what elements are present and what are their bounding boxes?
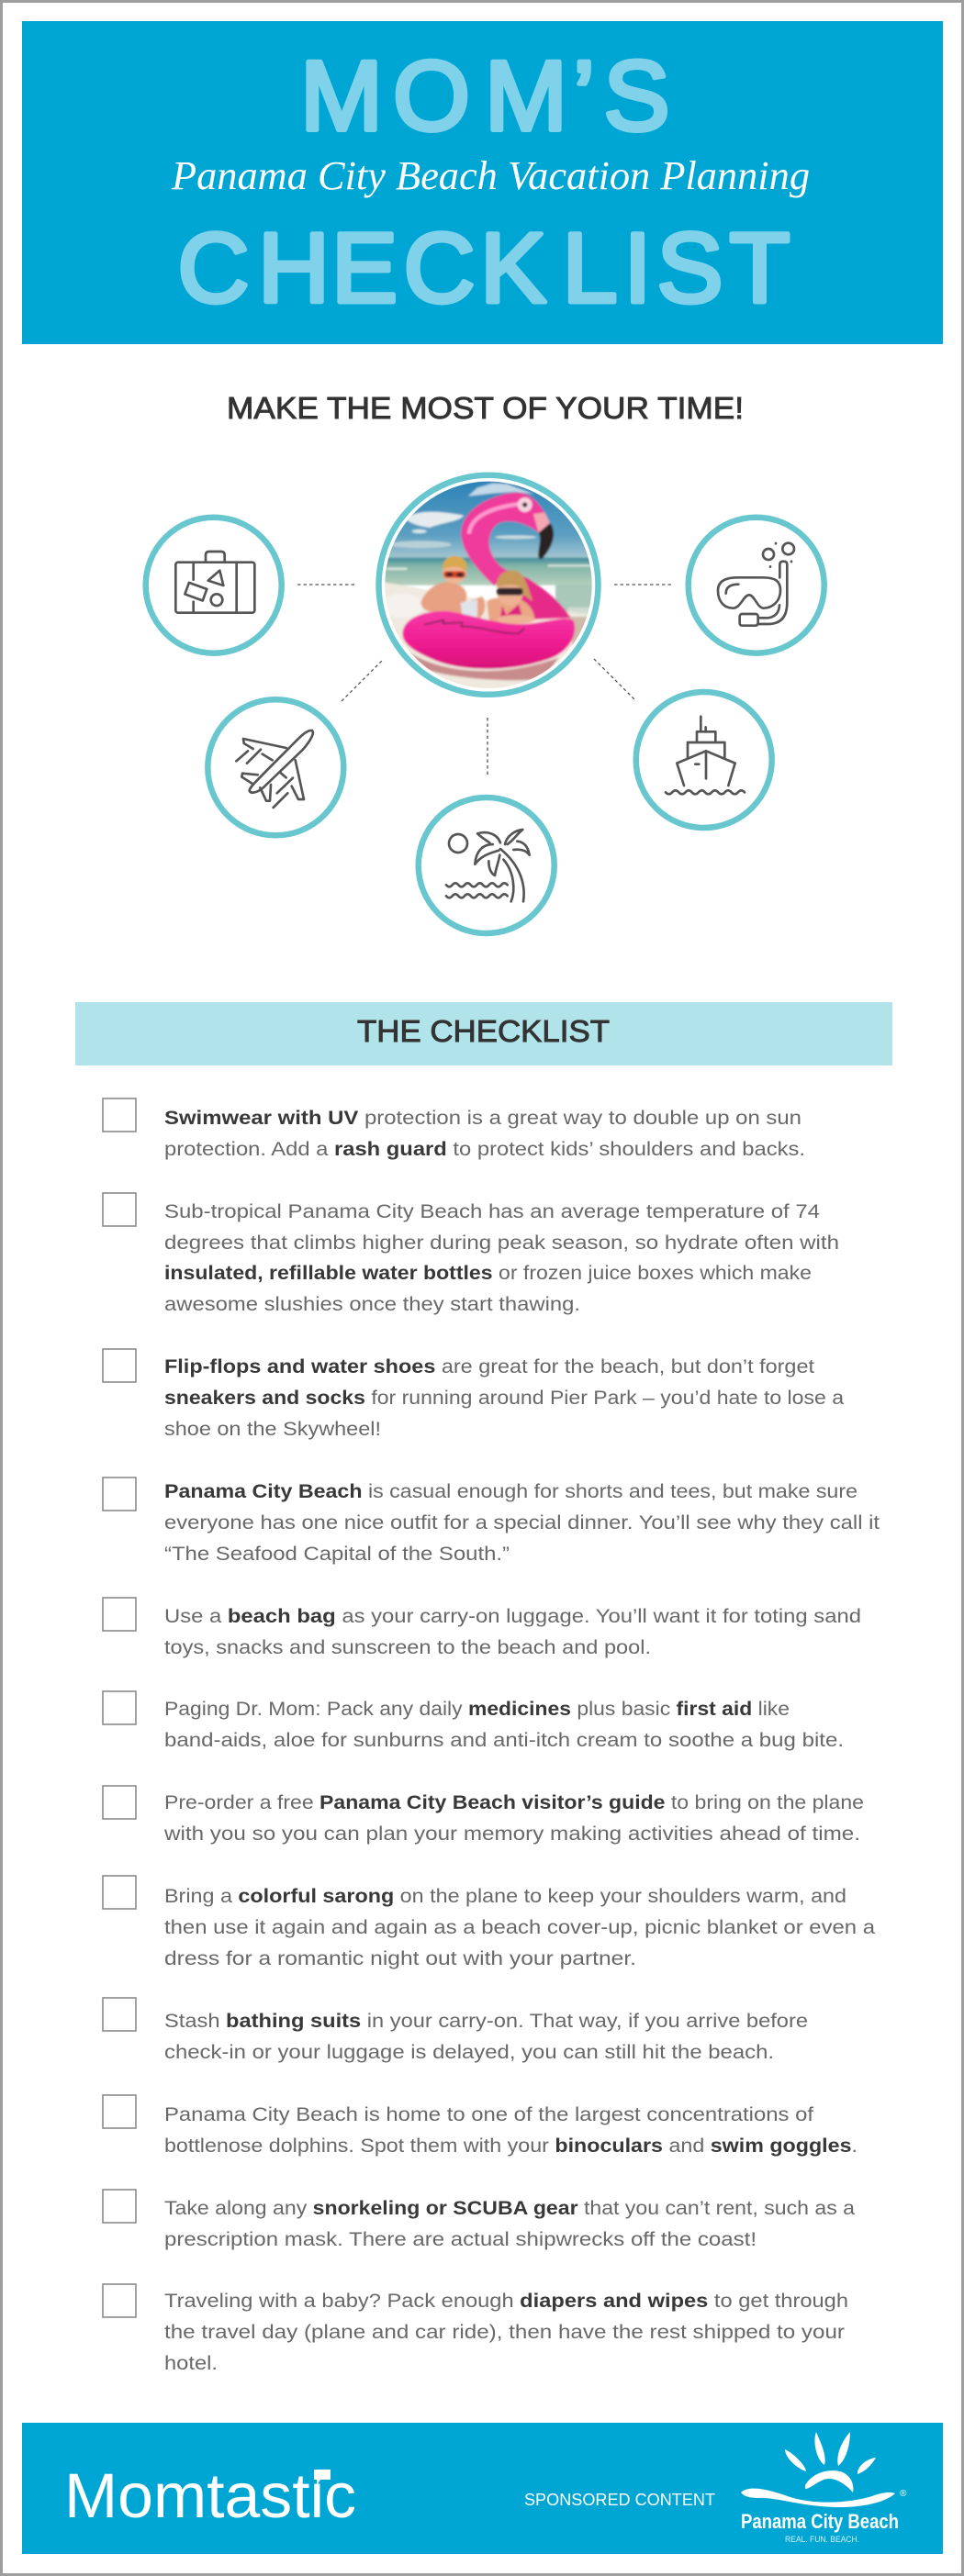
- icon: snorkel mask: [689, 518, 824, 653]
- heading: make the most of your time: MAKE THE MOST OF YOUR TIME!: [227, 391, 744, 425]
- checklist item 8: [103, 1876, 875, 1969]
- checklist item 3: [103, 1349, 844, 1440]
- checklist item 12: the travel day (plane and car ride), then have the rest shipped to your: [164, 2321, 845, 2343]
- checklist item 1: Swimwear with UV protection is a great way to double up on sun: [164, 1107, 801, 1129]
- checklist item 2: [103, 1193, 839, 1315]
- checklist item 7: with you so you can plan your memory making activities ahead of time.: [163, 1823, 860, 1845]
- checklist item 12: [103, 2284, 848, 2374]
- checklist item 5: Use a beach bag as your carry-on luggage. You’ll want it for toting sand: [164, 1605, 861, 1627]
- checklist item 8: then use it again and again as a beach cover-up, picnic blanket or even a: [164, 1916, 875, 1938]
- heading: the checklist: THE CHECKLIST: [357, 1014, 610, 1048]
- icon: airplane: [207, 699, 343, 835]
- checklist item 10: Panama City Beach is home to one of the largest concentrations of: [164, 2103, 813, 2125]
- checklist item 7: Pre-order a free Panama City Beach visitor’s guide to bring on the plane: [164, 1791, 864, 1813]
- checklist item 2: awesome slushies once they start thawing.: [164, 1293, 580, 1315]
- checklist item 12: Traveling with a baby? Pack enough diapers and wipes to get through: [164, 2290, 848, 2312]
- checklist item 4: Panama City Beach is casual enough for shorts and tees, but make sure: [164, 1480, 858, 1502]
- checklist item 1: protection. Add a rash guard to protect kids’ shoulders and backs.: [164, 1138, 805, 1160]
- icon: ship: [636, 692, 772, 828]
- checklist item 11: Take along any snorkeling or SCUBA gear that you can’t rent, such as a: [164, 2197, 855, 2219]
- title: CHECKLIST: CHECKLIST: [178, 212, 790, 323]
- title: MOM'S: MOM’S: [300, 40, 670, 151]
- neck back: [520, 575, 571, 620]
- logo: Panama City Beach: [741, 2432, 907, 2545]
- connector lines: [297, 585, 673, 776]
- checklist item 4: everyone has one nice outfit for a special dinner. You’ll see why they call it: [164, 1511, 880, 1533]
- checklist item 9: check-in or your luggage is delayed, you can still hit the beach.: [164, 2041, 774, 2063]
- float ring: [402, 611, 575, 669]
- icon: suitcase: [146, 518, 282, 653]
- girl: [487, 598, 534, 626]
- subtitle: Panama City Beach Vacation Planning: [171, 153, 810, 198]
- checklist item 11: [103, 2190, 855, 2250]
- boy: [420, 582, 485, 619]
- icon: palm tree and sun: [419, 797, 555, 933]
- checklist item 7: [103, 1786, 864, 1845]
- checklist item 9: Stash bathing suits in your carry-on. That way, if you arrive before: [164, 2010, 808, 2032]
- photo: kids on pink flamingo float: [378, 475, 599, 695]
- logo: Panama City Beach: ®: [900, 2489, 907, 2499]
- checklist item 3: Flip-flops and water shoes are great for the beach, but don’t forget: [164, 1355, 814, 1377]
- checklist item 1: [103, 1098, 805, 1160]
- checklist item 10: [103, 2095, 858, 2157]
- checklist item 3: sneakers and socks for running around Pier Park – you’d hate to lose a: [164, 1387, 844, 1409]
- footer banner: [22, 2423, 943, 2554]
- checklist item 5: toys, snacks and sunscreen to the beach and pool.: [164, 1636, 651, 1658]
- checklist item 8: dress for a romantic night out with your partner.: [164, 1947, 636, 1969]
- checklist item 5: [103, 1598, 861, 1658]
- checklist item 8: Bring a colorful sarong on the plane to keep your shoulders warm, and: [164, 1885, 846, 1907]
- flamingo neck and head: [461, 493, 550, 585]
- checklist item 4: “The Seafood Capital of the South.”: [164, 1543, 510, 1565]
- checklist item 12: hotel.: [164, 2352, 218, 2374]
- logo: Panama City Beach: REAL. FUN. BEACH.: [785, 2535, 859, 2545]
- checklist item 10: bottlenose dolphins. Spot them with your binoculars and swim goggles .: [164, 2135, 858, 2157]
- float shadow: [409, 652, 558, 680]
- sponsored content label: SPONSORED CONTENT: [524, 2490, 715, 2509]
- checklist item 3: shoe on the Skywheel!: [164, 1418, 381, 1440]
- checklist item 11: prescription mask. There are actual shipwrecks off the coast!: [164, 2228, 757, 2250]
- checklist item 2: insulated, refillable water bottles or frozen juice boxes which make: [164, 1262, 812, 1284]
- logo: Panama City Beach: Panama City Beach: [741, 2510, 899, 2533]
- checklist item 4: [103, 1478, 880, 1565]
- checklist item 9: [103, 1998, 808, 2063]
- checklist item 6: band-aids, aloe for sunburns and anti-itch cream to soothe a bug bite.: [164, 1729, 844, 1751]
- checklist item 6: Paging Dr. Mom: Pack any daily medicines plus basic first aid like: [164, 1698, 790, 1720]
- logo: Momtastic: Momtastic: [64, 2460, 356, 2531]
- checklist item 2: degrees that climbs higher during peak season, so hydrate often with: [164, 1232, 839, 1254]
- header banner: [22, 21, 943, 344]
- checklist header bar: [75, 1002, 892, 1065]
- checklist item 2: Sub-tropical Panama City Beach has an average temperature of 74: [164, 1200, 820, 1222]
- checklist item 6: [103, 1691, 844, 1751]
